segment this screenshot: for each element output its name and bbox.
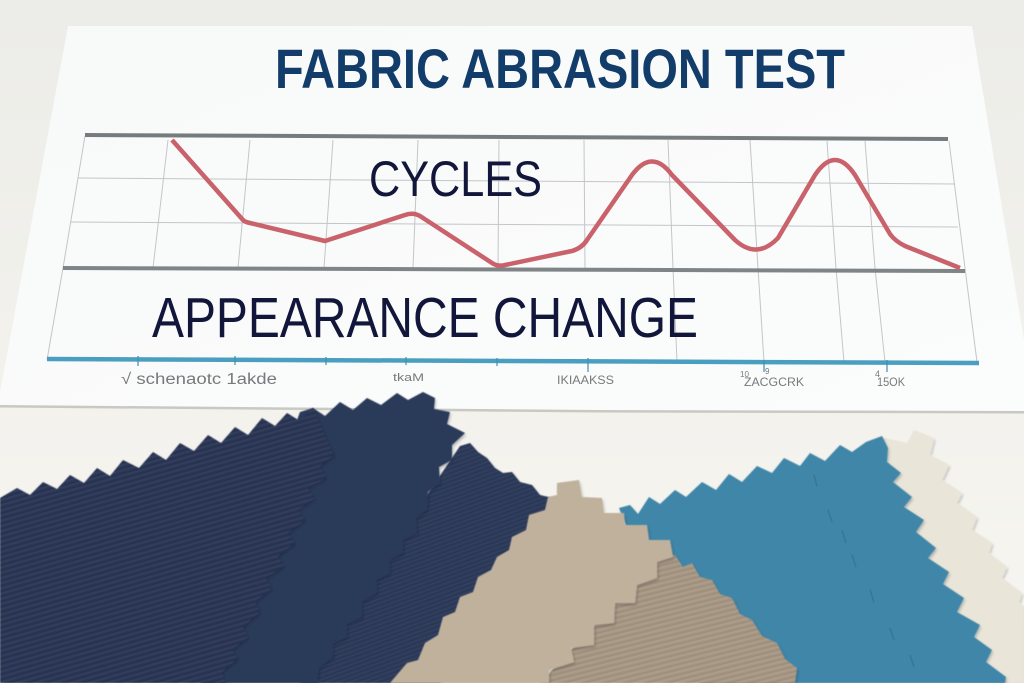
small axis captions [121, 367, 905, 389]
small axis captions: IKIAAKSS [557, 373, 614, 387]
fabric swatch: navy twill front [0, 408, 334, 683]
fabric swatch: navy suede middle [200, 392, 465, 683]
red data line [172, 140, 960, 268]
line chart: cycles vs appearance change [47, 135, 979, 372]
small axis captions: 10 [740, 370, 749, 379]
small axis captions: tkaM [393, 372, 424, 384]
axis ticks [138, 356, 887, 372]
teal fold notches [814, 475, 914, 667]
small axis captions: 9 [765, 367, 770, 376]
small axis captions: ZACGCRK [744, 375, 804, 389]
axis label: appearance change: APPEARANCE CHANGE [152, 286, 698, 350]
small axis captions: 15OK [877, 375, 905, 389]
axis label: cycles: CYCLES [369, 151, 542, 207]
fabric swatch: navy twill back [300, 443, 560, 683]
fabric swatch: cream [880, 430, 1024, 683]
small axis captions: √ schenaotc 1akde [121, 371, 277, 388]
fabric swatch: brown knit [540, 555, 797, 683]
small axis captions: 4 [875, 369, 880, 379]
fabric swatch: teal [619, 436, 1006, 683]
fabric swatch: tan suede [390, 480, 673, 683]
title: FABRIC ABRASION TEST [275, 37, 845, 100]
panel: paper chart sheet [0, 26, 1024, 414]
